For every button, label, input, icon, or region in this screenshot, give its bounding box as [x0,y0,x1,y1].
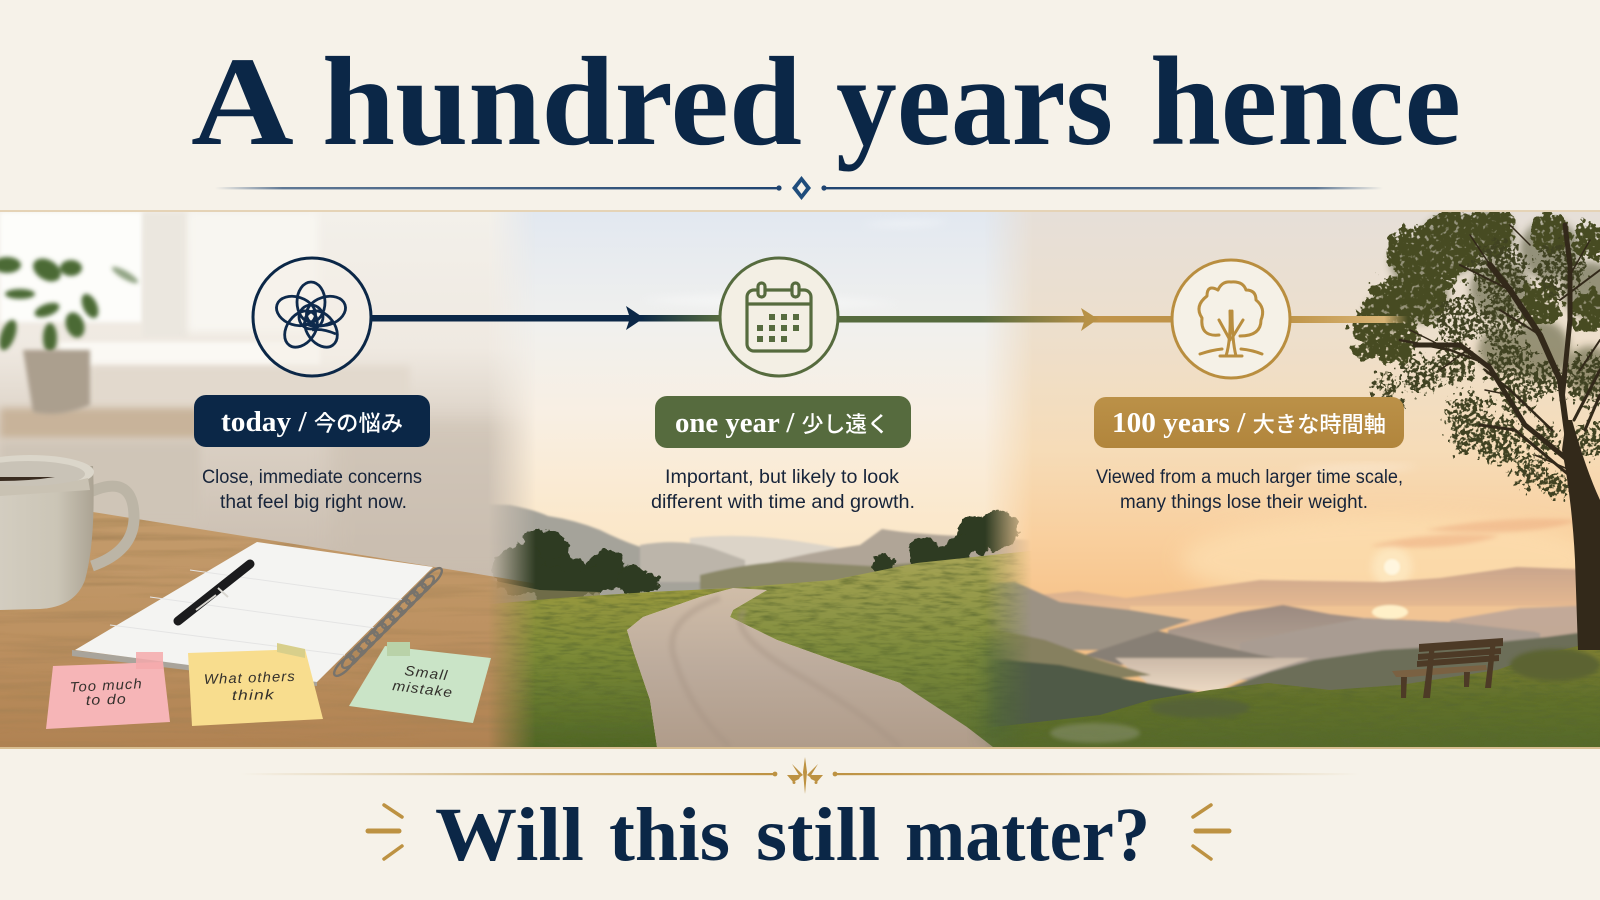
rays right of question [1193,805,1229,859]
scene: 100 years sunset valley [980,206,1600,747]
coffee mug [0,455,134,610]
sticky note: small mistake: Small [404,662,449,683]
title: hundred [322,32,802,172]
spiral notebook [72,542,445,686]
description: one year: different with time and growth. [651,492,915,513]
pen [178,564,250,621]
description: 100 years [1096,467,1403,513]
icon: tree [1172,260,1290,378]
description: 100 years: Viewed from a much larger time scale, [1096,467,1403,488]
description: 100 years: many things lose their weight. [1120,492,1368,513]
label pill: 100 years: 100 years / 大きな時間軸 [1112,407,1386,439]
title: years [836,32,1113,172]
bottom rule with gold ornament [240,757,1360,794]
left meadow [480,588,733,747]
panorama bottom edge [0,747,1600,749]
sticky note: what others think [188,643,323,726]
closing question: Will [435,793,584,877]
bench [1392,638,1503,698]
sticky note: too much to do [46,652,170,729]
near ridges [1167,604,1363,652]
scene: today desk and window [0,212,545,747]
gravel road [627,588,993,747]
closing question: this [609,793,730,877]
sticky note: too much to do: to do [86,691,127,708]
spiral binding [331,565,445,679]
description: today: Close, immediate concerns [202,467,422,488]
label pill: one year: one year / 少し遠く [675,407,889,439]
title: hence [1150,32,1461,172]
blurred room [0,212,545,612]
label pill: today [194,395,430,447]
closing question: still [756,793,880,877]
timeline tail into tree [1289,316,1408,323]
left hills [988,631,1150,680]
right near hill [1222,632,1578,690]
sticky note: too much to do: Too much [69,675,143,695]
icon: tangled worries [253,258,371,376]
timeline arrow: one year to 100 years [838,308,1174,331]
rays left of question [368,805,402,859]
description: one year [651,467,915,513]
scene: one year road and hills [480,212,1045,747]
sticky note: small mistake: mistake [392,677,454,700]
potted plant [0,254,140,414]
closing question: matter? [905,793,1150,877]
label pill: one year [655,396,911,448]
title: A [191,32,293,172]
right meadow [730,550,1040,747]
plant pot [23,350,90,414]
description: today: that feel big right now. [220,492,407,513]
big tree [1350,206,1600,650]
title rule with diamond ornament [215,176,1383,200]
sticky note: what others think: think [232,686,275,703]
description: one year: Important, but likely to look [665,467,900,488]
timeline arrow: today to one year [370,306,720,330]
foreground grass [985,640,1600,747]
description: today [202,467,422,513]
wooden table [0,505,545,747]
label pill: today: today / 今の悩み [221,406,403,438]
label pill: 100 years [1094,397,1404,448]
sticky note: small mistake [349,642,491,723]
sticky note: what others think: What others [204,668,296,687]
panorama: today, one year and 100 years scenes [0,206,1600,749]
panorama top edge [0,210,1600,212]
icon: calendar [720,258,838,376]
lake [1115,658,1310,693]
far ridge [1046,566,1576,624]
